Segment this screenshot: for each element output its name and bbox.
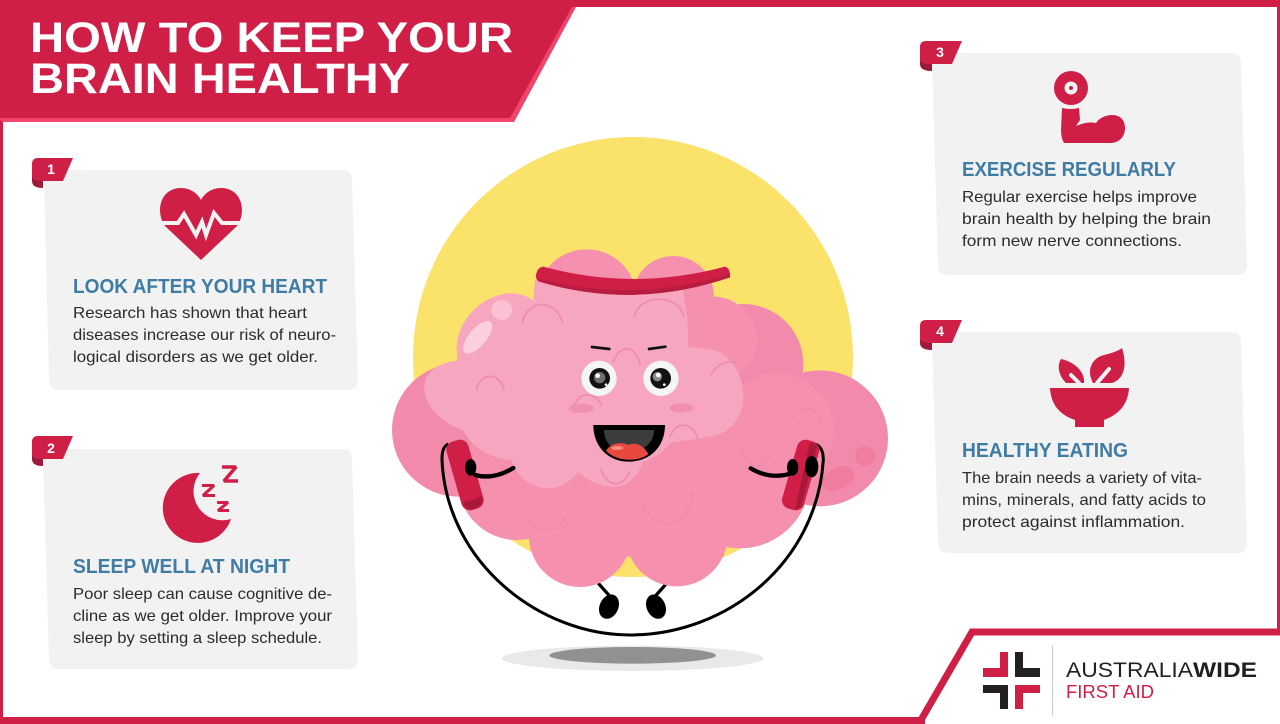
- ground shadow: [502, 646, 763, 671]
- number badge 1: [32, 158, 73, 188]
- brain fold lines: [427, 299, 821, 530]
- body text: Research has shown that heart: [73, 305, 308, 322]
- lobe highlights: [458, 300, 875, 495]
- body text: The brain needs a variety of vita-: [962, 470, 1202, 487]
- brain face area: [424, 280, 743, 488]
- mouth: [593, 425, 665, 462]
- logo wordmark: FIRST AID: [1066, 682, 1154, 702]
- yellow sun circle: [413, 137, 853, 577]
- number badge 3: 3: [936, 44, 944, 60]
- panel 1: look after your heart: [32, 158, 358, 390]
- brain body mid lobes: [458, 249, 833, 587]
- logo: cross mark: [983, 652, 1040, 709]
- title banner: [0, 0, 576, 122]
- logo wordmark: [1066, 659, 1257, 702]
- icon: heart with pulse: [156, 188, 246, 260]
- heading: EXERCISE REGULARLY: [962, 159, 1177, 181]
- body text: [73, 305, 336, 366]
- body text: Regular exercise helps improve: [962, 189, 1197, 206]
- number badge 2: [32, 436, 73, 466]
- icon: bowl with leaves: [1050, 348, 1129, 427]
- body text: sleep by setting a sleep schedule.: [73, 630, 322, 647]
- logo panel frame: [921, 632, 1280, 720]
- body text: [73, 586, 333, 647]
- number badge 4: [920, 320, 962, 350]
- body text: brain health by helping the brain: [962, 211, 1211, 228]
- body text: [962, 470, 1206, 531]
- headband: [536, 267, 730, 295]
- jump rope: [442, 444, 823, 635]
- number badge 1: 1: [47, 161, 55, 177]
- left handle: [444, 438, 486, 512]
- brain body back lobes: [392, 304, 888, 506]
- heading: HEALTHY EATING: [962, 440, 1128, 462]
- icon: arm with dumbbell: [1054, 71, 1125, 143]
- eyebrows: [592, 347, 665, 349]
- right handle: [780, 438, 821, 512]
- title: HOW TO KEEP YOUR: [30, 14, 513, 62]
- heading: SLEEP WELL AT NIGHT: [73, 556, 290, 578]
- logo wordmark: WIDE: [1193, 659, 1257, 682]
- body text: logical disorders as we get older.: [73, 349, 318, 366]
- body text: Poor sleep can cause cognitive de-: [73, 586, 332, 603]
- number badge 4: 4: [936, 323, 944, 339]
- body text: [962, 189, 1211, 250]
- cheeks: [568, 403, 694, 413]
- icon: moon with z letters: [163, 467, 238, 543]
- number badge 2: 2: [47, 440, 55, 456]
- panel 3: exercise regularly: [920, 41, 1247, 275]
- panel 4: healthy eating: [920, 320, 1247, 553]
- panel 2: sleep well at night: [32, 436, 358, 669]
- body text: mins, minerals, and fatty acids to: [962, 492, 1206, 509]
- heading: LOOK AFTER YOUR HEART: [73, 276, 327, 298]
- eyes: [581, 361, 679, 396]
- brain mascot: [392, 249, 888, 671]
- body text: diseases increase our risk of neuro-: [73, 327, 336, 344]
- logo divider: [1052, 645, 1053, 716]
- body text: cline as we get older. Improve your: [73, 608, 333, 625]
- logo wordmark: AUSTRALIA: [1066, 659, 1193, 682]
- body text: form new nerve connections.: [962, 233, 1182, 250]
- title: BRAIN HEALTHY: [30, 55, 410, 103]
- legs and shoes: [595, 583, 670, 622]
- number badge 3: [920, 41, 962, 71]
- title: [30, 14, 513, 103]
- body text: protect against inflammation.: [962, 514, 1185, 531]
- arms and hands: [465, 456, 818, 477]
